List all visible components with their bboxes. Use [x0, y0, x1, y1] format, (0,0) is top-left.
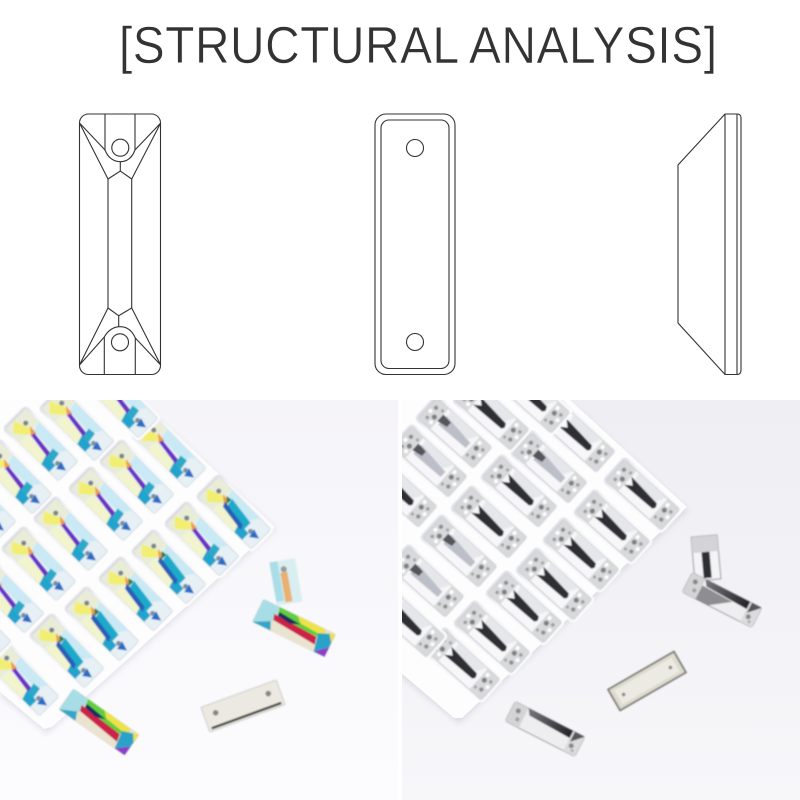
- photo: AB iridescent crystals in tray: [0, 400, 398, 756]
- tray of clear crystals: [402, 400, 682, 702]
- title: [STRUCTURAL ANALYSIS]: [119, 16, 717, 74]
- loose AB crystals and silver back plate: [59, 558, 335, 755]
- loose clear crystals and silver back plate: [505, 535, 762, 757]
- diagram: back view with two holes: [375, 114, 455, 374]
- tray of AB crystals: [0, 400, 274, 716]
- diagram: side profile: [678, 114, 741, 374]
- photo: clear crystals in tray: [402, 400, 800, 798]
- diagram: front view with facets: [80, 114, 161, 374]
